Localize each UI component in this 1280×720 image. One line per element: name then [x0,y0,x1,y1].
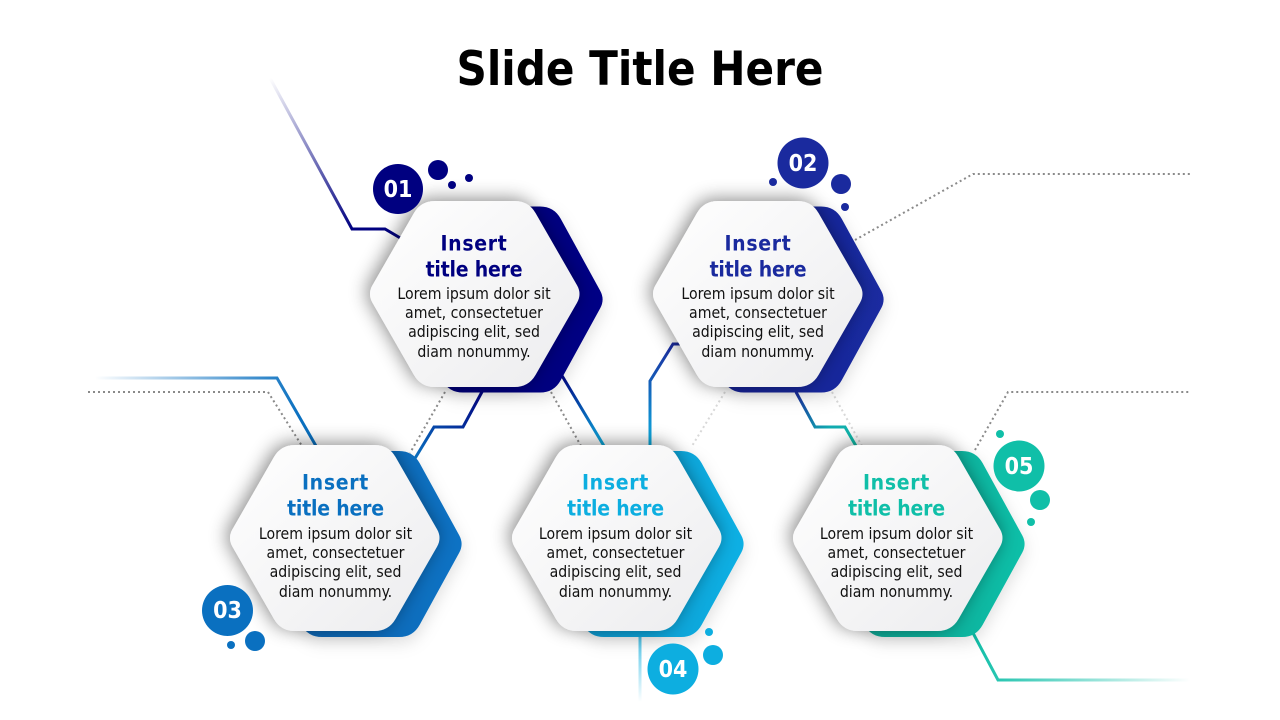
number badge 02 [769,138,851,211]
front hexagon 02 [653,201,862,387]
front hexagon 05 [793,445,1002,631]
back hexagon 01 [390,206,603,392]
body text 02: diam nonummy. [701,342,815,361]
body text 03: amet, consectetuer [267,543,405,562]
body text 01: adipiscing elit, sed [408,322,540,341]
body text 04: adipiscing elit, sed [550,562,681,581]
body text 01: amet, consectetuer [405,303,543,322]
connector: step 03 line to the left [95,378,316,446]
body text 05: adipiscing elit, sed [831,562,962,581]
connector: step 02 to step 05 light dotted [832,392,862,446]
body text 05: Lorem ipsum dolor sit [820,524,974,543]
connector: step 02 to step 04 light dotted [692,392,725,446]
body text 04: Lorem ipsum dolor sit [539,524,693,543]
panel: step 02 [653,138,884,392]
heading 02: Insert [724,232,792,256]
body text 02: Lorem ipsum dolor sit [681,284,835,303]
connector: step 02 dotted line to the right [855,174,1190,240]
panel: step 04 [512,445,744,694]
heading 03: title here [287,496,384,520]
number badge 03: 03 [213,598,242,624]
number badge 05 [994,430,1050,526]
back hexagon 04 [531,451,744,637]
title: Slide Title Here [456,42,824,97]
connector: step 02 to step 05 [796,392,856,446]
front hexagon 01 [370,201,580,387]
panel: step 01 [370,160,603,392]
heading 03: Insert [302,470,369,494]
number badge 04: 04 [659,657,687,683]
body text 04: amet, consectetuer [547,543,685,562]
number badge 05: 05 [1005,454,1033,480]
connector: step 05 dotted line to the right [975,392,1190,450]
number badge 01 [373,160,473,214]
body text 04: diam nonummy. [559,582,672,601]
number badge 01: 01 [384,177,412,203]
body text 02: adipiscing elit, sed [692,322,824,341]
connector: step 05 line to the right [973,633,1190,680]
panel: step 05 [793,430,1050,637]
back hexagon 05 [812,451,1025,637]
panel: step 03 [202,445,462,651]
body text 05: diam nonummy. [840,582,953,601]
connector: step 01 to step 04 [561,374,604,446]
heading 02: title here [710,258,806,282]
heading 04: Insert [582,470,649,494]
heading 01: title here [426,258,522,282]
connector: step 01 to step 03 dotted [410,392,445,453]
body text 03: adipiscing elit, sed [270,562,401,581]
body text 01: diam nonummy. [417,342,531,361]
number badge 02: 02 [789,151,817,177]
body text 02: amet, consectetuer [689,303,827,322]
connector: step 01 line fading to top left [270,78,402,239]
body text 03: Lorem ipsum dolor sit [259,524,413,543]
body text 03: diam nonummy. [279,582,392,601]
number badge 04 [648,628,723,694]
body text 05: amet, consectetuer [828,543,966,562]
heading 04: title here [567,496,664,520]
front hexagon 03 [230,445,440,631]
back hexagon 02 [671,206,884,392]
connector: step 04 line fading downward [638,630,642,702]
number badge 03 [202,585,265,651]
heading 05: Insert [863,470,930,494]
heading 05: title here [848,496,945,520]
connector: step 02 to step 04 [650,344,682,446]
connector: step 01 to step 03 [414,390,483,460]
back hexagon 03 [249,451,462,637]
body text 01: Lorem ipsum dolor sit [397,284,551,303]
connector: step 03 dotted line to the left [88,392,302,446]
heading 01: Insert [440,232,508,256]
front hexagon 04 [512,445,722,631]
connector: step 01 to step 04 dotted [551,392,581,446]
